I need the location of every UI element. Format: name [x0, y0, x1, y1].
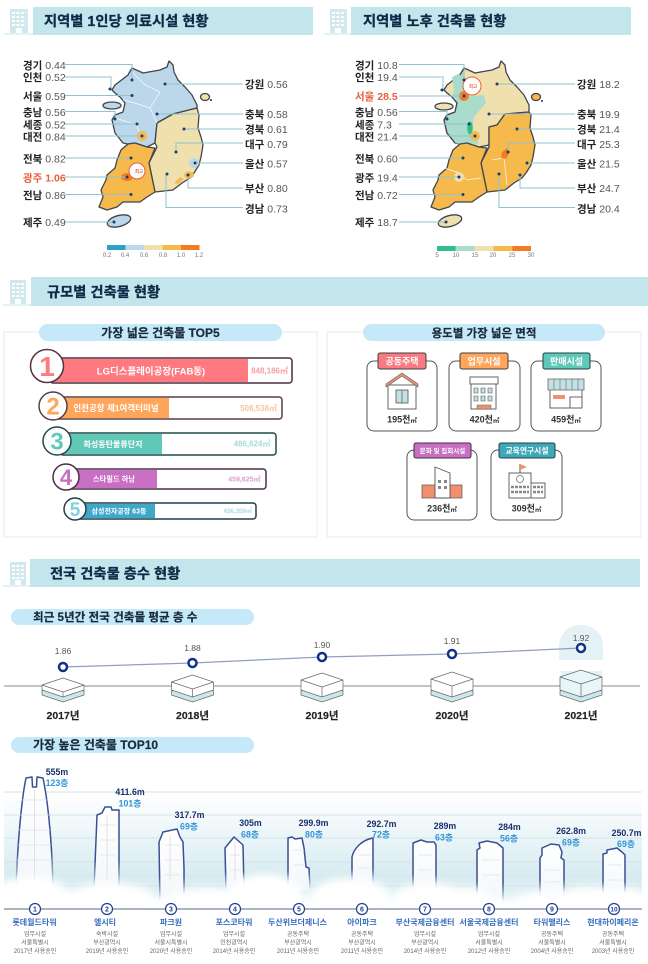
pill heading: 가장 높은 건축물 TOP10 — [11, 737, 254, 753]
legend: map 1: 0.6 — [140, 253, 149, 259]
building 10: 2003년 사용승인 — [592, 947, 634, 955]
building 6: 72층 — [372, 830, 390, 840]
전북: 전북 0.82 — [23, 154, 66, 166]
line chart: 평균 층수: 1.86 — [55, 646, 72, 656]
card: 판매시설 — [531, 353, 601, 431]
인천 — [23, 71, 112, 90]
경북 — [516, 124, 620, 136]
building 3: 2020년 사용승인 — [150, 947, 192, 955]
bar 2 — [39, 392, 282, 420]
building 10: 서울특별시 — [599, 938, 627, 946]
경남: 경남 0.73 — [245, 202, 288, 216]
충북 — [156, 109, 288, 121]
pill heading — [363, 324, 605, 341]
building 2: 숙박시설 — [96, 930, 118, 938]
card: 문화 및 집회시설: 문화 및 집회시설 — [420, 446, 465, 455]
building 5 — [268, 818, 329, 955]
building 5: 5 — [297, 906, 301, 914]
legend: map 2: 20 — [490, 253, 497, 259]
building 8: 2012년 사용승인 — [468, 947, 510, 955]
card: 업무시설 — [449, 353, 520, 431]
인천: 인천 19.4 — [355, 71, 398, 84]
card: 문화 및 집회시설 — [407, 443, 477, 520]
building 4: 인천광역시 — [220, 938, 248, 946]
강원: 강원 0.56 — [245, 78, 288, 91]
bar 1: 848,186㎡ — [251, 366, 288, 376]
대구: 대구 0.79 — [245, 138, 288, 151]
대전 — [355, 130, 476, 144]
building 7: 2014년 사용승인 — [404, 947, 446, 955]
callout: 최고 — [129, 163, 145, 179]
bar 1 — [30, 350, 292, 383]
울산: 울산 0.57 — [245, 158, 288, 170]
building 1: 업무시설 — [24, 930, 46, 938]
building 1: 서울특별시 — [21, 938, 49, 946]
icon: culture hall — [422, 467, 462, 498]
building 10 — [587, 828, 642, 955]
line chart: 평균 층수: 2020년 — [435, 709, 469, 722]
legend: map 2: 25 — [509, 253, 516, 259]
clouds — [0, 874, 648, 918]
충남 — [23, 106, 116, 120]
울산 — [194, 158, 288, 170]
bar 4 — [53, 464, 266, 490]
panel: 가장 넓은 건축물 TOP5 — [4, 324, 317, 537]
제주: 제주 18.7 — [355, 216, 398, 229]
building 5: 2011년 사용승인 — [277, 947, 319, 955]
card: 판매시설: 판매시설 — [550, 356, 583, 366]
building 2: 411.6m — [115, 787, 145, 797]
building 6: 292.7m — [367, 819, 397, 829]
전남 — [23, 189, 132, 202]
building 4: 68층 — [241, 830, 259, 840]
전남: 전남 0.72 — [355, 189, 398, 202]
building 1 — [12, 767, 68, 955]
icon: office building — [470, 377, 498, 409]
bar 4: 4 — [60, 465, 73, 490]
충북 — [488, 109, 620, 121]
header: 규모별 건축물 현황: 규모별 건축물 현황 — [47, 284, 160, 301]
전남 — [355, 189, 464, 202]
building 3 — [150, 810, 205, 955]
icon: store — [548, 379, 584, 408]
card: 문화 및 집회시설: 236천㎡ — [427, 502, 457, 514]
building 10: 현대하이페리온 — [587, 917, 639, 927]
경북 — [182, 124, 288, 136]
pill heading: 최근 5년간 전국 건축물 평균 층 수 — [11, 609, 254, 625]
인천 — [355, 71, 444, 92]
region labels: map 2 — [355, 59, 620, 229]
bar 5: 5 — [70, 500, 81, 521]
building 7: 289m — [434, 821, 456, 831]
building 2: 101층 — [119, 798, 141, 808]
building 7: 7 — [423, 906, 427, 914]
부산 — [518, 174, 620, 195]
대구: 대구 25.3 — [577, 138, 620, 151]
경기: 경기 10.8 — [355, 59, 398, 72]
building 8: 8 — [487, 906, 491, 914]
legend: map 2: 15 — [472, 253, 479, 259]
대전 — [23, 130, 144, 144]
card: 교육연구시설: 교육연구시설 — [505, 446, 549, 456]
building 8 — [460, 822, 521, 955]
buildings — [16, 777, 625, 905]
building 3: 업무시설 — [160, 930, 182, 938]
building 9 — [531, 826, 586, 955]
building 10: 250.7m — [612, 828, 642, 838]
callout: 최고: 최고 — [135, 168, 143, 175]
card: 교육연구시설 — [491, 443, 562, 520]
bar 4: 459,625㎡ — [228, 476, 260, 484]
chart: 가장 높은 건축물 TOP10 — [0, 767, 648, 955]
line chart: 평균 층수: 2021년 — [564, 709, 598, 722]
충북: 충북 0.58 — [245, 109, 288, 121]
header: 지역별 노후 건축물 현황: 지역별 노후 건축물 현황 — [363, 13, 506, 30]
bar 1: 1 — [39, 351, 55, 382]
building 7: 업무시설 — [414, 930, 436, 938]
전남: 전남 0.86 — [23, 189, 66, 202]
building 10: 10 — [610, 906, 618, 914]
building 3: 3 — [169, 906, 173, 914]
대전: 대전 21.4 — [355, 130, 398, 144]
building 5: 부산광역시 — [284, 938, 312, 946]
부산 — [186, 174, 288, 195]
map: 의료시설 — [99, 61, 212, 229]
building 2: 엘시티 — [94, 917, 116, 927]
line chart: 평균 층수: 1.91 — [444, 636, 461, 646]
building 3: 317.7m — [175, 810, 205, 820]
pill heading — [39, 324, 282, 341]
bar 3: 486,624㎡ — [234, 440, 270, 448]
line chart: 평균 층수 — [4, 625, 640, 722]
bar 4: 스타필드 하남 — [93, 474, 135, 484]
서울 — [355, 90, 466, 103]
legend: map 2 — [435, 246, 535, 259]
building 2 — [86, 787, 145, 955]
경기 — [23, 59, 134, 82]
card: 공동주택: 공동주택 — [385, 356, 419, 366]
legend: map 2: 10 — [453, 253, 460, 259]
line chart: 평균 층수: 1.88 — [184, 643, 201, 653]
building 4: 305m — [239, 818, 262, 828]
building 5: 299.9m — [299, 818, 329, 828]
인천: 인천 0.52 — [23, 71, 66, 84]
제주 — [355, 216, 448, 229]
card: 공동주택 — [367, 353, 437, 431]
광주: 광주 1.06 — [23, 172, 66, 184]
경남 — [498, 172, 620, 216]
bar 5: 삼성전자공장 63동 — [92, 506, 147, 516]
building 9: 2004년 사용승인 — [531, 947, 573, 955]
legend: map 1: 1.0 — [177, 253, 186, 259]
pill heading: 최근 5년간 전국 건축물 평균 층 수: 최근 5년간 전국 건축물 평균 층 수 — [33, 610, 198, 624]
bar 2: 2 — [46, 394, 60, 420]
building 1: 555m — [46, 767, 68, 777]
line chart: 평균 층수: 1.90 — [314, 640, 331, 650]
경기 — [355, 59, 466, 82]
세종: 세종 0.52 — [23, 118, 66, 132]
pill heading: 용도별 가장 넓은 면적 — [432, 326, 536, 340]
경북: 경북 0.61 — [245, 124, 288, 136]
세종 — [355, 118, 470, 132]
legend: map 1 — [103, 245, 204, 259]
card: 공동주택: 195천㎡ — [387, 414, 417, 424]
전북 — [23, 154, 132, 166]
building 5: 공동주택 — [287, 931, 309, 938]
광주 — [23, 172, 128, 184]
서울: 서울 0.59 — [23, 90, 66, 103]
광주: 광주 19.4 — [355, 172, 398, 184]
강원 — [496, 78, 620, 91]
경북: 경북 21.4 — [577, 124, 620, 136]
building 7: 부산국제금융센터 — [396, 917, 454, 927]
building 1: 1 — [33, 906, 37, 914]
building 5: 두산위브더제니스 — [268, 917, 328, 927]
building 7: 63층 — [435, 832, 453, 842]
부산: 부산 0.80 — [245, 182, 288, 195]
legend: map 1: 0.8 — [159, 253, 168, 259]
building 1: 123층 — [46, 778, 68, 788]
경남 — [166, 172, 288, 216]
bar 3: 3 — [50, 428, 64, 456]
building 6: 공동주택 — [351, 931, 373, 938]
대전: 대전 0.84 — [23, 130, 66, 144]
충남: 충남 0.56 — [355, 106, 398, 119]
bar 2: 508,538㎡ — [240, 404, 277, 413]
header: 지역별 노후 건축물 현황 — [324, 7, 631, 35]
building 8: 서울특별시 — [475, 938, 503, 946]
legend: map 1: 0.2 — [103, 253, 112, 259]
building 9: 69층 — [562, 838, 580, 848]
legend: map 1: 0.4 — [121, 253, 130, 259]
building 2: 2 — [105, 906, 109, 914]
building 6: 아이파크 — [347, 917, 377, 927]
building 3: 69층 — [180, 822, 198, 832]
callout: 최고 — [463, 77, 481, 95]
울산: 울산 21.5 — [577, 158, 620, 170]
icon: school — [509, 464, 545, 498]
building 9: 서울특별시 — [538, 938, 566, 946]
bar 3: 화성동탄물류단지 — [84, 439, 142, 449]
building 4: 업무시설 — [223, 930, 245, 938]
대구 — [506, 138, 620, 154]
building 4 — [213, 818, 262, 955]
header: 전국 건축물 층수 현황 — [3, 559, 640, 587]
line chart: 평균 층수: 2018년 — [176, 709, 209, 722]
전북: 전북 0.60 — [355, 154, 398, 166]
제주: 제주 0.49 — [23, 216, 66, 229]
legend: map 2: 5 — [435, 253, 439, 259]
bar 3 — [43, 427, 276, 456]
callout: 최고: 최고 — [469, 83, 477, 90]
충남: 충남 0.56 — [23, 106, 66, 119]
building 4: 포스코타워 — [216, 917, 252, 927]
bar 2: 인천공항 제1여객터미널 — [73, 403, 159, 413]
세종 — [23, 118, 138, 132]
building 3: 서울시특별시 — [154, 938, 188, 946]
제주 — [23, 216, 116, 229]
세종: 세종 7.3 — [355, 118, 392, 132]
building 4: 2014년 사용승인 — [213, 947, 255, 955]
building stacks — [42, 670, 602, 702]
대구 — [174, 138, 288, 154]
card: 교육연구시설: 309천㎡ — [512, 502, 542, 514]
header: 지역별 1인당 의료시설 현황: 지역별 1인당 의료시설 현황 — [44, 13, 209, 30]
header: 전국 건축물 층수 현황: 전국 건축물 층수 현황 — [50, 566, 180, 582]
legend: map 1: 1.2 — [195, 253, 204, 259]
충남 — [355, 106, 448, 120]
building 8: 56층 — [500, 834, 518, 844]
전북 — [355, 154, 464, 166]
building 2: 부산광역시 — [93, 938, 121, 946]
line chart: 평균 층수: 2017년 — [46, 709, 80, 722]
building 9: 262.8m — [556, 826, 586, 836]
building 8: 서울국제금융센터 — [460, 917, 518, 927]
card: 업무시설: 420천㎡ — [470, 414, 500, 424]
building 7: 부산광역시 — [411, 938, 439, 946]
pill heading: 가장 높은 건축물 TOP10: 가장 높은 건축물 TOP10 — [33, 737, 158, 752]
building 7 — [396, 821, 456, 955]
panel: 용도별 가장 넓은 면적 — [327, 324, 641, 537]
광주 — [355, 172, 460, 184]
building 6: 부산광역시 — [348, 938, 376, 946]
header: 규모별 건축물 현황 — [3, 277, 648, 306]
bar 1: LG디스플레이공장(FAB동) — [97, 366, 205, 378]
경남: 경남 20.4 — [577, 202, 620, 216]
building 3: 파크원 — [160, 917, 182, 927]
header: 지역별 1인당 의료시설 현황 — [4, 7, 313, 35]
서울: 서울 28.5 — [355, 90, 398, 103]
서울 — [23, 90, 134, 103]
building 6 — [341, 819, 397, 955]
강원: 강원 18.2 — [577, 78, 620, 91]
icon: house — [386, 373, 418, 409]
bar 5 — [64, 498, 256, 521]
강원 — [164, 78, 288, 91]
building 9: 타워팰리스 — [534, 917, 571, 927]
line chart: 평균 층수: 2019년 — [305, 709, 339, 722]
card: 업무시설: 업무시설 — [467, 356, 501, 366]
building 8: 284m — [498, 822, 521, 832]
bar 5: 436,359㎡ — [223, 507, 253, 515]
building 9: 공동주택 — [541, 931, 563, 938]
경기: 경기 0.44 — [23, 59, 66, 72]
map: 노후 건축물 — [431, 61, 543, 229]
울산 — [526, 158, 620, 170]
building 6: 2011년 사용승인 — [341, 947, 383, 955]
building 5: 80층 — [305, 830, 323, 840]
충북: 충북 19.9 — [577, 109, 620, 121]
line chart: 평균 층수: 1.92 — [573, 633, 590, 643]
building 6: 6 — [360, 906, 364, 914]
부산: 부산 24.7 — [577, 182, 620, 195]
card: 판매시설: 459천㎡ — [551, 414, 581, 424]
region labels: map 1 — [23, 59, 288, 229]
building 9: 9 — [550, 906, 554, 914]
building 10: 공동주택 — [602, 931, 624, 938]
building 2: 2019년 사용승인 — [86, 947, 128, 955]
building 4: 4 — [233, 906, 237, 914]
building 8: 업무시설 — [478, 930, 500, 938]
legend: map 2: 30 — [528, 253, 535, 259]
building 1: 롯데월드타워 — [12, 917, 57, 927]
pill heading: 가장 넓은 건축물 TOP5 — [101, 325, 220, 340]
building 10: 69층 — [617, 839, 635, 849]
building 1: 2017년 사용승인 — [14, 947, 56, 955]
